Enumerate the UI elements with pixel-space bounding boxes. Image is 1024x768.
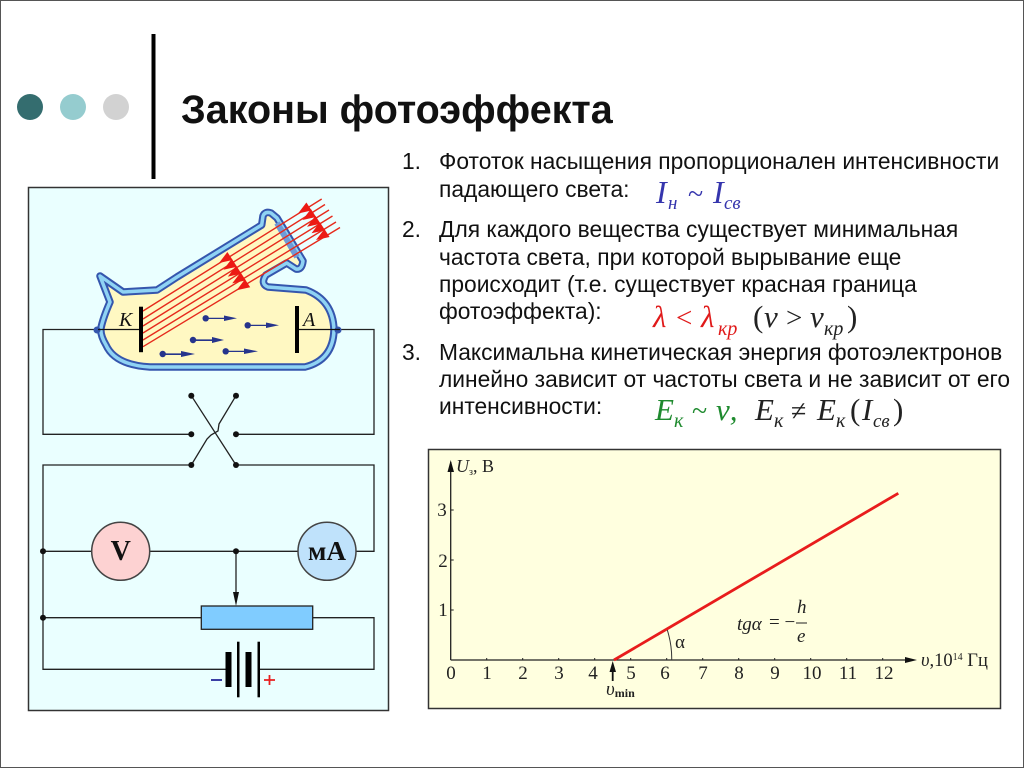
formula 3: ≠: [791, 396, 806, 427]
law 1 text: [402, 148, 999, 202]
title: Законы фотоэффекта: [181, 88, 614, 132]
law 3 text: [402, 339, 1010, 419]
battery minus: [211, 679, 222, 681]
red characteristic line: [614, 493, 898, 660]
milliammeter: мА: [308, 536, 346, 566]
formula 3: (: [850, 392, 860, 427]
threshold label: υ: [606, 679, 615, 700]
formula 2: ): [847, 299, 857, 334]
x axis numbers: 2: [518, 663, 528, 684]
x axis numbers: 10: [802, 663, 822, 684]
law 2 text: Для каждого вещества существует минимальная: [439, 216, 958, 242]
law 3 text: Максимальна кинетическая энергия фотоэлектронов: [439, 339, 1002, 365]
formula 2: λ: [700, 299, 714, 334]
formula 3: ~: [692, 396, 707, 427]
x axis numbers: 6: [660, 663, 670, 684]
law 1 text: Фототок насыщения пропорционален интенсивности: [439, 148, 999, 174]
formula 2: <: [676, 302, 692, 334]
rheostat: [201, 606, 313, 629]
y axis numbers: 3: [437, 500, 447, 521]
formula 1: н: [668, 193, 677, 214]
angle label: α: [675, 632, 685, 653]
angle arc: [667, 630, 672, 660]
formula 3: E: [754, 392, 774, 427]
formula 3: св: [873, 411, 890, 432]
formula 2: кр: [824, 318, 843, 340]
y axis numbers: [437, 500, 448, 621]
x axis numbers: 3: [554, 663, 564, 684]
cathode label: K: [118, 309, 134, 331]
slope formula: tgα: [737, 614, 763, 635]
law 3 text: интенсивности:: [439, 393, 602, 419]
formula 3: к: [774, 410, 784, 432]
law 2 text: частота света, при которой вырывание еще: [439, 244, 901, 270]
formula 3: ν,: [716, 392, 738, 427]
x axis numbers: 8: [734, 663, 744, 684]
law 1 text: 1.: [402, 148, 421, 174]
y axis numbers: 1: [438, 600, 448, 621]
ray arrowheads: [219, 202, 330, 290]
law 2 text: [402, 216, 958, 324]
x axis numbers: 7: [698, 663, 708, 684]
slope formula: h: [797, 597, 806, 618]
y axis label: з: [469, 467, 473, 478]
formula 3: I: [861, 392, 874, 427]
wires: [43, 330, 374, 669]
threshold label: min: [615, 686, 635, 700]
law 3 text: линейно зависит от частоты света и не зависит от его: [439, 366, 1010, 392]
law 2 text: фотоэффекта):: [439, 298, 602, 324]
formula 3: E: [654, 392, 674, 427]
photocell tube: [94, 212, 342, 367]
x axis numbers: 5: [626, 663, 636, 684]
battery plus: [264, 675, 275, 685]
x axis numbers: 9: [770, 663, 780, 684]
threshold arrow: [610, 661, 616, 681]
formula 2: [652, 299, 857, 340]
law 3 text: 3.: [402, 339, 421, 365]
slope formula: e: [797, 626, 805, 647]
formula 1: I: [655, 174, 668, 210]
formula 3: к: [836, 410, 846, 432]
switch and junction nodes: [40, 393, 239, 621]
y axis numbers: 2: [438, 551, 448, 572]
law 1 text: падающего света:: [439, 176, 629, 202]
y axis label: , В: [473, 456, 494, 476]
formula 2: ν: [810, 299, 824, 334]
x axis numbers: 11: [839, 663, 857, 684]
voltmeter: V: [111, 536, 131, 567]
formula 3: к: [674, 410, 684, 432]
formula 2: кр: [718, 318, 737, 340]
panel: stopping voltage graph: [428, 450, 1000, 708]
title divider bar: [152, 34, 156, 179]
x axis numbers: [446, 663, 894, 684]
cathode: [139, 307, 143, 352]
formula 2: (: [753, 299, 763, 334]
x axis numbers: 12: [874, 663, 894, 684]
y axis label: U: [456, 456, 470, 476]
formula 1: ~: [688, 179, 703, 210]
anode: [295, 306, 299, 353]
formula 2: >: [786, 302, 802, 334]
law 2 text: 2.: [402, 216, 421, 242]
x axis numbers: 0: [446, 663, 456, 684]
formula 1: [655, 174, 741, 214]
electrons: [160, 315, 279, 357]
panel: photoelectric circuit: [28, 188, 388, 710]
x axis numbers: 1: [482, 663, 492, 684]
voltmeter: [92, 522, 150, 580]
formula 3: E: [816, 392, 836, 427]
x axis label: υ,10: [921, 651, 953, 671]
battery: [226, 642, 260, 697]
formula 2: ν: [764, 299, 778, 334]
formula 3: ): [893, 392, 903, 427]
decorative dots: [17, 94, 129, 120]
formula 3: [654, 392, 903, 432]
slope formula: [737, 597, 807, 647]
law 2 text: происходит (т.е. существует красная граница: [439, 271, 917, 297]
x axis numbers: 4: [588, 663, 598, 684]
formula 2: λ: [652, 299, 666, 334]
formula 1: I: [712, 174, 725, 210]
milliammeter: [298, 522, 356, 580]
anode label: A: [301, 309, 316, 331]
light rays: [143, 199, 340, 347]
x axis label: Гц: [963, 651, 988, 671]
formula 1: св: [724, 193, 741, 214]
slope formula: = −: [769, 612, 795, 633]
x axis label: 14: [953, 652, 963, 663]
axes: [448, 460, 917, 663]
